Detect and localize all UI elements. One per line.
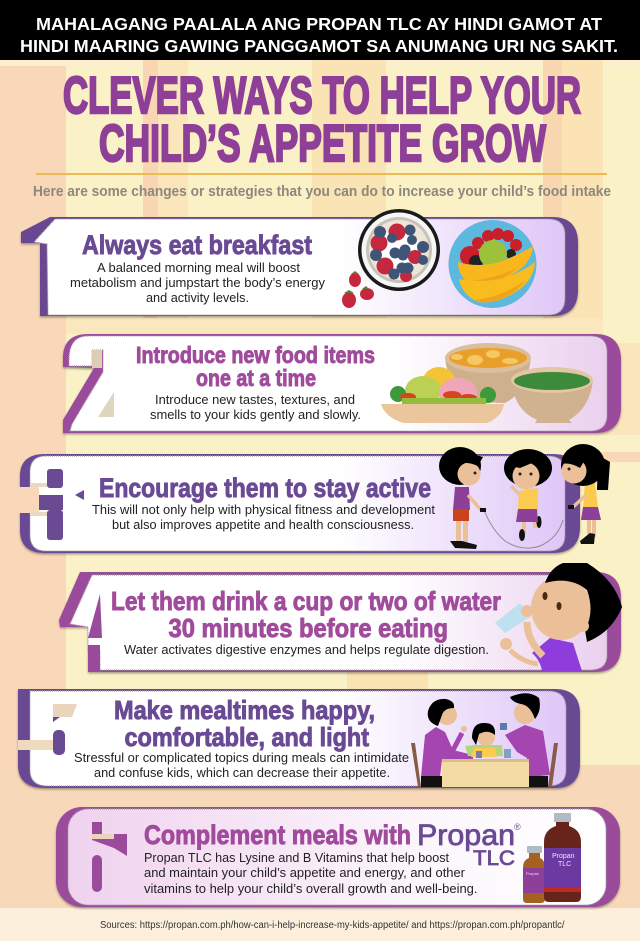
- numeral 1 and card frame: [21, 217, 578, 316]
- numeral 6 and card frame: [56, 807, 620, 907]
- numeral 4 inner shapes: [88, 594, 102, 672]
- panel: step 3 stay active: [18, 444, 610, 553]
- icon: small bottle: Propan: [526, 871, 539, 876]
- card body: [70, 575, 607, 670]
- card body: [30, 456, 565, 551]
- numeral 5 and card frame: [18, 689, 580, 788]
- panel: step 2 new foods: [63, 334, 621, 433]
- icon: fruit plate: [448, 220, 536, 308]
- illustration: girl jumping: [504, 449, 552, 541]
- body text: Propan TLC has Lysine and B Vitamins that help boost: [144, 851, 450, 865]
- illustration: girl with rope: [561, 444, 610, 544]
- heading: Make mealtimes happy,: [114, 695, 375, 725]
- body text: This will not only help with physical fitness and development: [92, 503, 436, 517]
- body text: [74, 751, 409, 780]
- icon: large bottle: Propan: [552, 853, 575, 860]
- card body: [30, 691, 566, 786]
- body text: Introduce new tastes, textures, and: [155, 393, 355, 407]
- numeral 6 inner shapes: [92, 822, 127, 892]
- heading: Let them drink a cup or two of water: [111, 586, 501, 616]
- body text: and activity levels.: [146, 291, 249, 305]
- numeral 3 and card frame: [20, 454, 580, 553]
- icon: strawberries: [342, 271, 374, 308]
- icon: berry bowl: [358, 209, 440, 291]
- body text: [70, 261, 326, 305]
- notice banner: [0, 0, 640, 60]
- panel: step 6 propan tlc: [56, 807, 620, 907]
- panel: step 5 happy mealtimes: [18, 689, 580, 788]
- illustration: family at table: [411, 693, 558, 787]
- panel: step 4 drink water: [59, 563, 622, 672]
- body text: Water activates digestive enzymes and helps regulate digestion.: [124, 643, 489, 657]
- icon: green soup bowl: [511, 367, 593, 423]
- heading: [136, 342, 375, 391]
- heading: [114, 695, 375, 752]
- body text: vitamins to help your child’s overall growth and well-being.: [144, 882, 478, 896]
- numeral 2 and card frame: [63, 334, 621, 433]
- logo: propan tlc: ®: [514, 822, 521, 832]
- numeral 2 cut-outs: [63, 350, 114, 426]
- panel: step 1 breakfast: [21, 209, 578, 316]
- icon: large bottle: TLC: [558, 861, 571, 868]
- icon: soup bowl: [445, 343, 531, 403]
- notice banner: MAHALAGANG PAALALA ANG PROPAN TLC AY HINDI GAMOT AT: [36, 14, 602, 34]
- body text: [150, 393, 361, 422]
- heading: Encourage them to stay active: [99, 473, 431, 503]
- icon: small bottle: [523, 846, 545, 903]
- body text: but also improves appetite and health consciousness.: [112, 518, 414, 532]
- body text: A balanced morning meal will boost: [97, 261, 301, 275]
- body text: Stressful or complicated topics during meals can intimidate: [74, 751, 409, 765]
- sources: Sources: https://propan.com.ph/how-can-i-help-increase-my-kids-appetite/ and https://propan.com.ph/propantlc/: [100, 920, 565, 931]
- icon: large bottle: [544, 813, 581, 902]
- title: [63, 67, 581, 173]
- body text: [144, 851, 478, 896]
- card body: [34, 219, 565, 315]
- logo: propan tlc: TLC: [473, 847, 515, 870]
- heading: one at a time: [196, 365, 316, 391]
- heading: comfortable, and light: [124, 722, 369, 752]
- illustration: child drinking water: [495, 563, 622, 671]
- heading: Introduce new food items: [136, 342, 375, 368]
- numeral 3 inner shapes: [18, 469, 84, 540]
- heading: [111, 586, 501, 643]
- illustration: jump rope: [484, 510, 563, 548]
- numeral 4 and card frame: [59, 572, 621, 672]
- body text: and confuse kids, which can decrease their appetite.: [94, 766, 390, 780]
- heading: Complement meals with: [144, 820, 411, 850]
- notice banner: HINDI MAARING GAWING PANGGAMOT SA ANUMANG URI NG SAKIT.: [20, 36, 618, 56]
- body text: and maintain your child’s appetite and energy, and other: [144, 866, 465, 880]
- heading: Always eat breakfast: [82, 230, 312, 260]
- icon: fruit plate: [381, 367, 504, 423]
- card body: [69, 336, 607, 431]
- illustration: boy: [439, 447, 486, 549]
- logo: propan tlc: Propan: [417, 819, 515, 852]
- numeral 5 inner shapes: [18, 704, 77, 755]
- body text: metabolism and jumpstart the body’s energy: [70, 276, 326, 290]
- card body: [68, 809, 606, 905]
- heading: 30 minutes before eating: [168, 613, 448, 643]
- body text: smells to your kids gently and slowly.: [150, 408, 361, 422]
- logo: propan tlc: [417, 819, 521, 870]
- body text: [92, 503, 436, 532]
